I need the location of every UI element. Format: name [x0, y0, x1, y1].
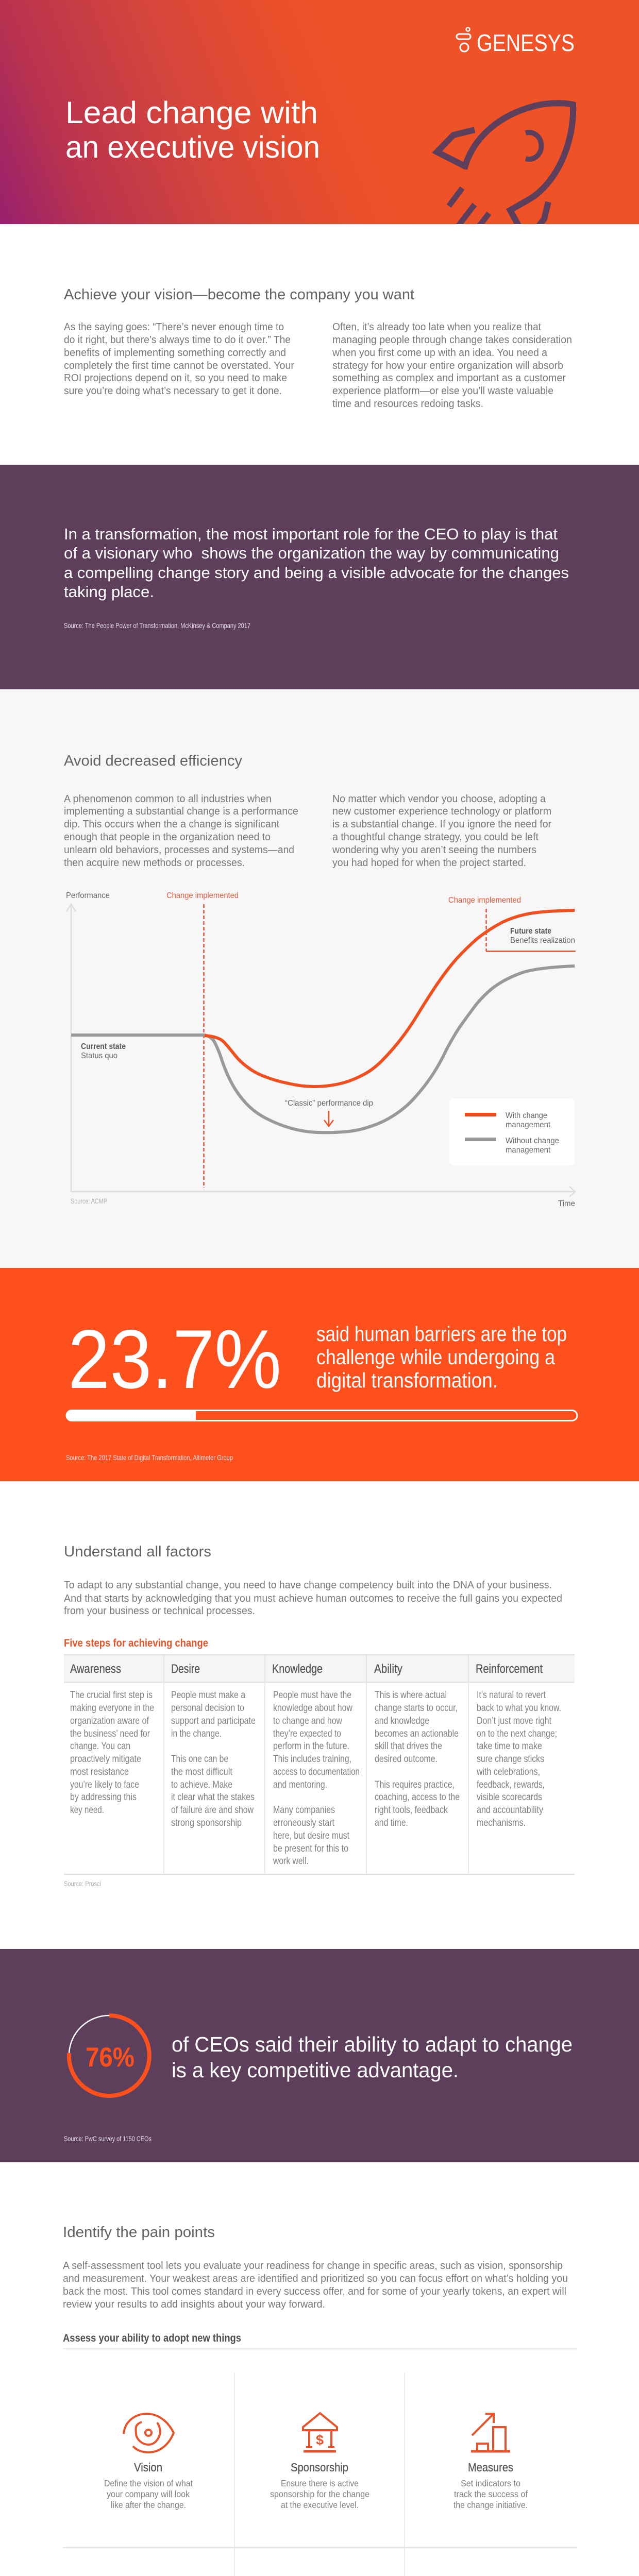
description: Set indicators to [461, 2478, 520, 2488]
text block: intro right: something as complex and important as a customer [332, 372, 566, 384]
column: knowledge: This includes training, [273, 1753, 351, 1765]
description: the change initiative. [453, 2500, 528, 2510]
description [270, 2478, 369, 2510]
axis label: time: Time [558, 1199, 575, 1208]
label: current state [81, 1042, 126, 1060]
description: track the success of [454, 2489, 528, 2499]
column: desire: This one can be [171, 1753, 228, 1765]
text block: intro right [332, 321, 572, 410]
text block: intro left: benefits of implementing something correctly and [64, 347, 286, 359]
description: sponsorship for the change [270, 2489, 369, 2499]
column: ability: coaching, access to the [375, 1791, 460, 1803]
donut chart: 76% [69, 2015, 149, 2096]
column: awareness: by addressing this [70, 1791, 137, 1803]
text block: right: new customer experience technology or platform [332, 806, 551, 817]
axis label: performance: Performance [66, 891, 110, 900]
panel: intro [64, 286, 572, 410]
line: without change management [71, 966, 575, 1132]
column: awareness: The crucial first step is [70, 1689, 153, 1701]
text block: back the most. This tool comes standard in every success offer, and for some of your yearly tokens, an expert will [63, 2286, 566, 2297]
column: reinforcement: on to the next change; [477, 1728, 557, 1739]
stat text [172, 2032, 573, 2082]
column: ability [374, 1662, 460, 1828]
stat text: is a key competitive advantage. [172, 2058, 459, 2082]
text block: left: enough that people in the organization need to [64, 832, 271, 843]
column: knowledge: Many companies [273, 1804, 335, 1816]
column: ability: Ability [374, 1662, 402, 1676]
source: Source: The People Power of Transformation, McKinsey & Company 2017 [64, 621, 250, 630]
panel: 76% stat [0, 1949, 639, 2162]
stat text: of CEOs said their ability to adapt to change [172, 2032, 573, 2056]
legend: management [506, 1146, 551, 1155]
icon: rocket [437, 103, 573, 231]
text block: review your results to add insights about your way forward. [63, 2299, 325, 2310]
panel: hero [0, 0, 639, 231]
column: awareness [70, 1662, 154, 1816]
label: classic performance dip: “Classic” performance dip [285, 1099, 373, 1108]
column: knowledge [272, 1662, 360, 1867]
line: with change management [205, 910, 575, 1087]
legend: Without change [506, 1137, 559, 1145]
column: knowledge: Knowledge [272, 1662, 323, 1676]
panel: understand all factors [64, 1544, 575, 1888]
column: awareness: making everyone in the [70, 1702, 154, 1714]
text block: intro left [64, 321, 294, 397]
label: Measures [468, 2461, 513, 2474]
text block [64, 1580, 562, 1617]
text block: intro left: sure you’re doing what’s necessary to get it done. [64, 385, 282, 397]
column: reinforcement: visible scorecards [477, 1791, 542, 1803]
text block: left: then acquire new methods or processes. [64, 857, 245, 869]
title: an executive vision [65, 130, 320, 164]
description: your company will look [107, 2489, 190, 2499]
stat text: challenge while undergoing a [316, 1345, 555, 1369]
table: five steps [64, 1655, 575, 1874]
label: Vision [134, 2461, 162, 2474]
heading: Avoid decreased efficiency [64, 753, 243, 769]
axes [66, 904, 575, 1197]
text block: right: a thoughtful change strategy, you could be left [332, 832, 539, 843]
text block: right: No matter which vendor you choose, adopting a [332, 793, 546, 805]
quote text [64, 525, 569, 601]
subheading: Assess your ability to adopt new things [63, 2332, 241, 2344]
column: reinforcement: It’s natural to revert [477, 1689, 546, 1701]
text block: right: is a substantial change. If you ignore the need for [332, 819, 551, 830]
label: change implemented: Change implemented [166, 891, 239, 900]
column: awareness: change. You can [70, 1740, 130, 1752]
subheading: Five steps for achieving change [64, 1637, 208, 1649]
text block: left [64, 793, 298, 869]
stat text: digital transformation. [316, 1368, 498, 1392]
column: knowledge: People must have the [273, 1689, 351, 1701]
column: ability: This requires practice, [375, 1779, 455, 1790]
column: desire: in the change. [171, 1728, 222, 1739]
icon: eye [124, 2414, 174, 2452]
text block: from your business or technical processes. [64, 1605, 255, 1617]
column: desire: the most difficult [171, 1766, 232, 1777]
description: Define the vision of what [104, 2478, 193, 2488]
column: ability: and time. [375, 1817, 408, 1828]
legend [449, 1098, 575, 1165]
label: future state: Future state [510, 927, 551, 936]
text block: left: implementing a substantial change is a performance [64, 806, 298, 817]
text block: And that starts by acknowledging that you must achieve human outcomes to receive the full gains you expected [64, 1593, 562, 1604]
text block: and measurement. Your weakest areas are identified and prioritized so you can focus effort on what’s holding you [63, 2273, 568, 2284]
column: ability: right tools, feedback [375, 1804, 448, 1816]
column: knowledge: they’re expected to [273, 1728, 341, 1739]
legend: management [506, 1121, 551, 1129]
source: Source: The 2017 State of Digital Transformation, Altimeter Group [66, 1453, 233, 1462]
column: desire: strong sponsorship [171, 1817, 242, 1828]
text block: intro left: do it right, but there’s always time to do it over.” The [64, 334, 291, 346]
column: knowledge: and mentoring. [273, 1779, 327, 1790]
arrow: dip [324, 1111, 333, 1126]
column: knowledge: perform in the future. [273, 1740, 349, 1752]
column: ability: and knowledge [375, 1715, 429, 1726]
column: desire [171, 1662, 256, 1828]
cell: sponsorship [270, 2413, 369, 2510]
label: future state [510, 927, 575, 945]
column: ability: desired outcome. [375, 1753, 438, 1765]
column: knowledge: knowledge about how [273, 1702, 353, 1714]
text block: left: A phenomenon common to all industries when [64, 793, 272, 805]
progress bar [66, 1410, 577, 1421]
column: reinforcement: with celebrations, [476, 1766, 540, 1777]
column: desire: it clear what the stakes [171, 1791, 255, 1803]
column: ability: becomes an actionable [375, 1728, 459, 1739]
column: awareness: Awareness [70, 1662, 121, 1676]
icon: bank [303, 2413, 337, 2451]
column: reinforcement: back to what you know. [477, 1702, 561, 1714]
column: ability: change starts to occur, [375, 1702, 458, 1714]
text block: A self-assessment tool lets you evaluate your readiness for change in specific areas, such as vision, sponsorship [63, 2260, 563, 2272]
legend: With change [506, 1111, 547, 1120]
column: ability: skill that drives the [375, 1740, 442, 1752]
column: desire: support and participate [171, 1715, 256, 1726]
stat text [316, 1322, 567, 1392]
quote text: taking place. [64, 583, 154, 601]
text block: intro left: completely the first time cannot be overstated. Your [64, 360, 294, 371]
column: reinforcement: feedback, rewards, [477, 1779, 545, 1790]
column: desire: to achieve. Make [171, 1779, 232, 1790]
column: reinforcement: Reinforcement [476, 1662, 543, 1676]
column: knowledge: access to documentation [273, 1766, 360, 1777]
text block: To adapt to any substantial change, you need to have change competency built into the DNA of your business. [64, 1580, 552, 1591]
title [65, 95, 320, 164]
donut chart: 76%: 76% [86, 2042, 134, 2073]
column: desire: of failure are and show [171, 1804, 254, 1816]
text block: right [332, 793, 551, 869]
text block [63, 2260, 568, 2310]
quote text: of a visionary who shows the organization the way by communicating [64, 544, 559, 562]
label: current state: Status quo [81, 1052, 117, 1060]
source: Source: PwC survey of 1150 CEOs [64, 2134, 152, 2143]
column: ability: This is where actual [375, 1689, 447, 1701]
column: awareness: you’re likely to face [70, 1779, 139, 1790]
text block: left: unlearn old behaviors, processes and systems—and [64, 844, 294, 856]
cell: vision [104, 2414, 193, 2510]
quote text: In a transformation, the most important role for the CEO to play is that [64, 525, 558, 543]
source: Source: ACMP [71, 1197, 107, 1205]
column: knowledge: to change and how [273, 1715, 343, 1726]
description: like after the change. [111, 2500, 186, 2510]
column: reinforcement: sure change sticks [477, 1753, 544, 1765]
column: desire: Desire [171, 1662, 200, 1676]
quote text: a compelling change story and being a visible advocate for the changes [64, 564, 569, 582]
source: Source: Prosci [64, 1879, 101, 1888]
text block: right: wondering why you aren’t seeing the numbers [332, 844, 536, 856]
chart: performance over time [66, 891, 576, 1208]
column: reinforcement: take time to make [477, 1740, 542, 1752]
future state baseline [486, 951, 576, 952]
text block: intro right: managing people through change takes consideration [332, 334, 572, 346]
text block: intro left: As the saying goes: “There’s never enough time to [64, 321, 284, 333]
column: knowledge: be present for this to [273, 1843, 348, 1854]
description [104, 2478, 193, 2510]
icon: Genesys logo [457, 28, 575, 56]
panel: CEO quote [0, 465, 639, 689]
column: awareness: most resistance [70, 1766, 129, 1777]
column: awareness: organization aware of [70, 1715, 149, 1726]
description [453, 2478, 528, 2510]
column: awareness: proactively mitigate [70, 1753, 141, 1765]
text block: left: dip. This occurs when the a change is significant [64, 819, 279, 830]
stat text: said human barriers are the top [316, 1322, 567, 1346]
text block: intro left: ROI projections depend on it, so you need to make [64, 372, 287, 384]
panel: avoid decreased efficiency [0, 689, 639, 1268]
label: Sponsorship [291, 2461, 348, 2474]
panel: 23.7% stat [0, 1268, 639, 1481]
column: reinforcement [476, 1662, 561, 1828]
column: awareness: key need. [70, 1804, 104, 1816]
icon: bank: $ [316, 2432, 324, 2448]
panel: identify the pain points [63, 2224, 577, 2576]
description: Ensure there is active [281, 2478, 359, 2488]
column: awareness: the business’ need for [70, 1728, 150, 1739]
column: knowledge: here, but desire must [273, 1830, 349, 1841]
column: reinforcement: and accountability [477, 1804, 543, 1816]
marker: change implemented lines [204, 904, 486, 1188]
column: reinforcement: mechanisms. [477, 1817, 526, 1828]
label: change implemented 2: Change implemented [448, 896, 521, 905]
heading: Achieve your vision—become the company you want [64, 286, 414, 303]
title: Lead change with [65, 95, 318, 130]
column: reinforcement: Don’t just move right [477, 1715, 551, 1726]
column: desire: People must make a [171, 1689, 245, 1701]
text block: intro right: when you first come up with an idea. You need a [332, 347, 548, 359]
icon: Genesys logo: GENESYS [477, 29, 575, 56]
heading: Understand all factors [64, 1544, 211, 1560]
text block: intro right: experience platform—or else you’ll waste valuable [332, 385, 553, 397]
description: at the executive level. [281, 2500, 359, 2510]
heading: Identify the pain points [63, 2224, 215, 2241]
big number: 23.7% [68, 1313, 281, 1406]
label: current state: Current state [81, 1042, 126, 1051]
icon: growth chart [471, 2414, 510, 2451]
column: knowledge: erroneously start [273, 1817, 334, 1828]
text block: intro right: strategy for how your entire organization will absorb [332, 360, 563, 371]
cell: measures [453, 2414, 528, 2510]
column: desire: personal decision to [171, 1702, 244, 1714]
text block: right: you had hoped for when the project started. [332, 857, 526, 869]
column: knowledge: work well. [273, 1855, 309, 1867]
text block: intro right: time and resources redoing tasks. [332, 398, 483, 410]
text block: intro right: Often, it’s already too late when you realize that [332, 321, 541, 333]
label: future state: Benefits realization [510, 936, 575, 945]
